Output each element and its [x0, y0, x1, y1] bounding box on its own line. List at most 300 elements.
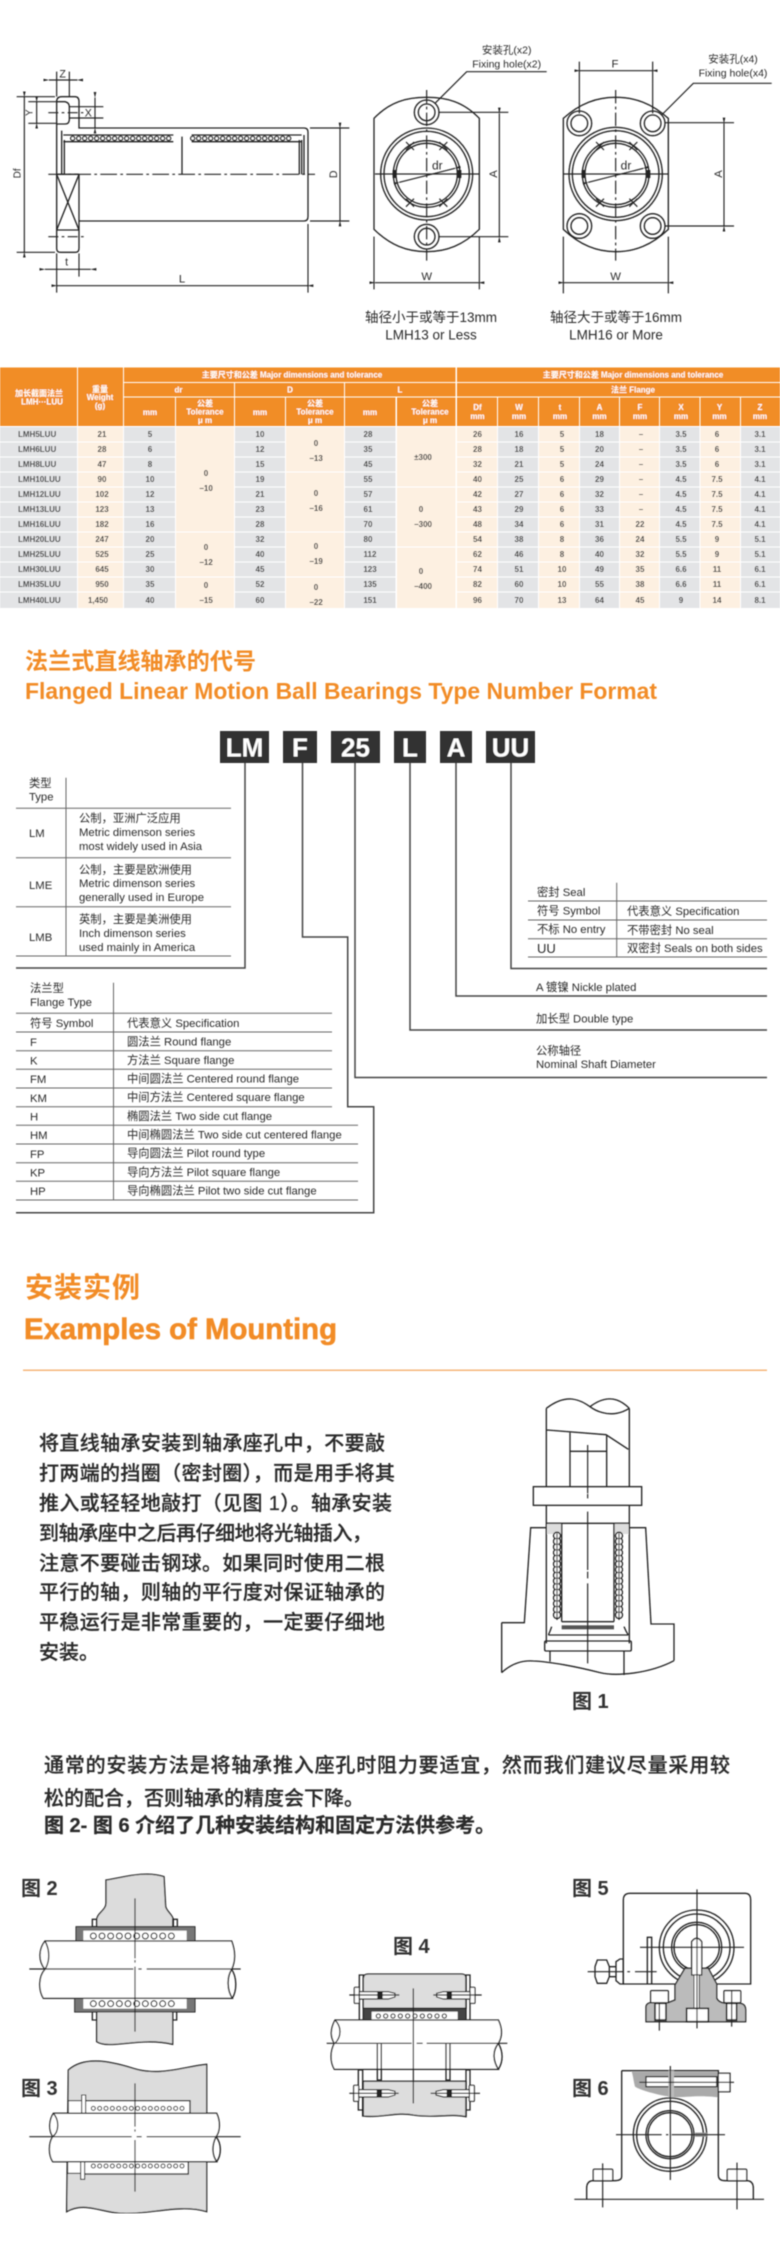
type table: 类型 [29, 776, 52, 790]
table rows: LMH13LUU [18, 505, 61, 514]
table rows: 26 [473, 430, 482, 439]
table rows: 3.1 [754, 445, 766, 454]
table rows: 16 [515, 430, 524, 439]
table rows: 29 [595, 475, 604, 484]
flange type table: FM [30, 1074, 46, 1086]
table rows: 6 [715, 460, 720, 469]
table body shading [0, 427, 780, 608]
table rows: 35 [146, 580, 155, 589]
table rows: – [639, 490, 644, 499]
table header: mm [553, 412, 567, 421]
table rows: 9 [679, 596, 684, 605]
table rows: 6.6 [675, 565, 687, 574]
seal table: UU [537, 941, 556, 956]
table header: μ m [198, 416, 212, 425]
table rows: 32 [256, 535, 265, 544]
table rows: 48 [473, 520, 482, 529]
table rows: 5.5 [675, 550, 687, 559]
merged tolerance values: 0 [419, 567, 424, 576]
table rows: 5 [148, 430, 153, 439]
table rows: 25 [515, 475, 524, 484]
table rows: 57 [364, 490, 373, 499]
flange type table: 导向方法兰 Pilot square flange [127, 1165, 280, 1179]
seal table: 不带密封 No seal [627, 923, 714, 937]
table header: 公差 [197, 398, 213, 408]
table rows: 7.5 [711, 475, 723, 484]
table rows: – [639, 445, 644, 454]
table rows: 3.5 [675, 445, 687, 454]
table header: mm [592, 412, 607, 421]
seal table: 密封 Seal [537, 885, 585, 899]
table rows: LMH10LUU [18, 475, 61, 484]
table rows: 45 [364, 460, 373, 469]
table rows: 5 [560, 445, 565, 454]
flange type table: 法兰型 [30, 981, 64, 995]
table rows: 6.6 [675, 580, 687, 589]
caption: LMH13 or less: 轴径小于或等于13mm [365, 309, 497, 325]
table rows: 7.5 [711, 505, 723, 514]
flange type table: HM [30, 1130, 48, 1142]
text: mounting instructions: 平稳运行是非常重要的，一定要仔细地 [39, 1611, 385, 1634]
label: nominal shaft diameter: Nominal Shaft Diameter [536, 1059, 656, 1071]
heading: examples of mounting: 安装实例 [25, 1272, 140, 1303]
table header: A [597, 403, 603, 412]
table rows: 28 [364, 430, 373, 439]
table rows: 135 [363, 580, 377, 589]
text: mounting instructions: 注意不要碰击钢球。如果同时使用二根 [39, 1552, 385, 1575]
merged tolerance values: ±300 [414, 453, 432, 462]
figure 5 [588, 1889, 751, 2031]
label: nominal shaft diameter [536, 1044, 656, 1071]
table rows: 20 [595, 445, 604, 454]
table rows: 5 [560, 460, 565, 469]
type table: generally used in Europe [79, 892, 204, 904]
drawing: LMH16 or more front view: F [612, 58, 619, 70]
merged tolerance values: 0 [314, 542, 319, 551]
table rows: 30 [146, 565, 155, 574]
merged tolerance values: −400 [414, 582, 433, 591]
type table: 公制，亚洲广泛应用 [79, 811, 181, 825]
drawing: side section of flanged bearing [13, 68, 349, 293]
table rows: LMH5LUU [18, 430, 56, 439]
drawing: side section of flanged bearing: X [85, 107, 92, 119]
table rows: 29 [515, 505, 524, 514]
text: general mounting note [44, 1753, 730, 1837]
table rows: 14 [713, 596, 722, 605]
table rows: 64 [595, 596, 604, 605]
table rows: 8 [560, 535, 565, 544]
drawing: LMH16 or more front view [563, 58, 772, 293]
table rows: 5.1 [754, 550, 766, 559]
table rows: 55 [595, 580, 604, 589]
label: figure 1: 图 1 [572, 1691, 609, 1713]
table rows: LMH8LUU [18, 460, 56, 469]
figure 1: bearing in housing [502, 1399, 674, 1675]
table rows: 28 [473, 445, 482, 454]
table rows: 20 [146, 535, 155, 544]
table rows: 49 [595, 565, 604, 574]
merged tolerance values: −12 [199, 558, 213, 567]
text: mounting instructions: 推入或轻轻地敲打（见图 1）。轴承安装 [39, 1492, 392, 1515]
table header: mm [674, 412, 688, 421]
merged tolerance values: 0 [204, 543, 209, 552]
type table: LMB [29, 932, 52, 944]
table rows: 21 [98, 430, 107, 439]
drawing: side section of flanged bearing: Df [13, 168, 24, 178]
table rows: 123 [95, 505, 109, 514]
table rows: 40 [256, 550, 265, 559]
table header: 公差 [422, 398, 438, 408]
table rows: 74 [473, 565, 482, 574]
flange type table: 中间方法兰 Centered square flange [127, 1090, 305, 1104]
table rows: 82 [473, 580, 482, 589]
label: nickle plated: A 镀镍 Nickle plated [536, 980, 636, 994]
divider [23, 1370, 767, 1371]
flange type table: H [30, 1112, 38, 1124]
heading: type number format: Flanged Linear Motion Ball Bearings Type Number Format [25, 678, 657, 704]
text: mounting instructions: 平行的轴，则轴的平行度对保证轴承的 [39, 1581, 385, 1604]
table rows: 6 [560, 505, 565, 514]
table header: LMH···LUU [21, 398, 63, 406]
table rows: 52 [256, 580, 265, 589]
text: mounting instructions: 打两端的挡圈（密封圈），而是用手将其 [39, 1462, 395, 1485]
table rows: 15 [256, 460, 265, 469]
table rows: LMH35LUU [18, 580, 61, 589]
table rows: 247 [95, 535, 109, 544]
table rows: 3.1 [754, 460, 766, 469]
table rows: 70 [515, 596, 524, 605]
table rows: 6 [560, 475, 565, 484]
table rows: 31 [595, 520, 604, 529]
table rows: 22 [636, 520, 645, 529]
caption: LMH13 or less [365, 309, 497, 342]
table rows: 13 [146, 505, 155, 514]
table header: (g) [95, 402, 105, 410]
table rows: 51 [515, 565, 524, 574]
merged tolerance values: 0 [314, 583, 319, 592]
table rows: 40 [473, 475, 482, 484]
table header: mm [512, 412, 526, 421]
table rows: 19 [256, 475, 265, 484]
table header: X [678, 403, 684, 412]
table rows: 90 [98, 475, 107, 484]
table header: Tolerance [411, 408, 449, 416]
flange type table: K [30, 1056, 38, 1068]
table rows: 43 [473, 505, 482, 514]
callout: fixing hole x4: 安装孔(x4) [708, 52, 758, 66]
flange type table: 方法兰 Square flange [127, 1053, 234, 1067]
table rows: 3.5 [675, 460, 687, 469]
table rows: 7.5 [711, 520, 723, 529]
table header: mm [753, 412, 767, 421]
table rows: 62 [473, 550, 482, 559]
type table [16, 776, 231, 956]
table rows: 33 [595, 505, 604, 514]
flange type table: Flange Type [30, 997, 92, 1009]
table header: 主要尺寸和公差 Major dimensions and tolerance [543, 370, 724, 380]
drawing: LMH13 or less front view [374, 72, 547, 289]
text: general mounting note: 图 2- 图 6 介绍了几种安装结构和固定方法供参考。 [44, 1813, 495, 1837]
table rows: 40 [595, 550, 604, 559]
table rows: 12 [256, 445, 265, 454]
figure 4 [327, 1974, 507, 2117]
flange type table [16, 981, 358, 1200]
table rows: 24 [595, 460, 604, 469]
table rows: 32 [595, 490, 604, 499]
type table: LME [29, 880, 53, 892]
table rows: 4.5 [675, 520, 687, 529]
table rows: 38 [515, 535, 524, 544]
drawing: side section of flanged bearing: L [179, 274, 185, 286]
table rows: 45 [256, 565, 265, 574]
table header: mm [470, 412, 485, 421]
table rows: 6 [560, 520, 565, 529]
table header [0, 368, 780, 426]
seal table: 符号 Symbol [537, 904, 600, 918]
table rows: 25 [146, 550, 155, 559]
table rows: 96 [473, 596, 482, 605]
type table: 公制，主要是欧洲使用 [79, 862, 192, 876]
table rows: 28 [256, 520, 265, 529]
table rows: LMH20LUU [18, 535, 61, 544]
table rows: 10 [146, 475, 155, 484]
table rows: LMH25LUU [18, 550, 61, 559]
table rows [18, 430, 766, 605]
flange type table: F [30, 1037, 37, 1049]
table rows: 3.1 [754, 430, 766, 439]
table rows: 6.1 [754, 580, 766, 589]
caption: LMH16 or more: 轴径大于或等于16mm [550, 309, 682, 325]
text: general mounting note: 通常的安装方法是将轴承推入座孔时阻力要适宜，然而我们建议尽量采用较 [44, 1753, 730, 1777]
merged tolerance values: −13 [309, 454, 323, 463]
table rows: 55 [364, 475, 373, 484]
type table: most widely used in Asia [79, 841, 203, 853]
flange type table: 导向圆法兰 Pilot round type [127, 1146, 265, 1160]
callout: fixing hole x4 [699, 52, 767, 80]
type table: used mainly in America [79, 942, 196, 954]
heading: examples of mounting [24, 1272, 337, 1346]
drawing: LMH13 or less front view: W [421, 271, 432, 283]
table rows: 112 [364, 550, 377, 559]
table rows: 54 [473, 535, 482, 544]
flange type table: 中间圆法兰 Centered round flange [127, 1072, 299, 1086]
table rows: 5 [560, 430, 565, 439]
table rows: 11 [713, 580, 722, 589]
table rows: 525 [95, 550, 109, 559]
table rows: 28 [98, 445, 107, 454]
table header: Z [758, 403, 763, 412]
code boxes: A [447, 732, 466, 762]
type table: Type [29, 792, 54, 804]
table header: dr [174, 386, 182, 394]
merged tolerance values: −300 [414, 520, 433, 529]
table rows: 10 [256, 430, 265, 439]
table header: μ m [308, 416, 322, 425]
table rows: 4.5 [675, 505, 687, 514]
table rows: 40 [146, 596, 155, 605]
flange type table: 圆法兰 Round flange [127, 1034, 231, 1048]
flange type table: FP [30, 1149, 44, 1161]
table header: 主要尺寸和公差 Major dimensions and tolerance [202, 370, 383, 380]
table header: t [559, 403, 562, 412]
callout: fixing hole x2 [472, 44, 541, 70]
table rows: 6 [715, 445, 720, 454]
table header: mm [253, 408, 267, 417]
table rows: 6 [715, 430, 720, 439]
table rows: 5.5 [675, 535, 687, 544]
table rows: 42 [473, 490, 482, 499]
merged tolerance values: 0 [314, 489, 319, 498]
merged tolerance values: −19 [309, 557, 323, 566]
figure 6 [574, 2066, 764, 2209]
table header: mm [712, 412, 727, 421]
merged tolerance values: −10 [199, 484, 213, 493]
merged tolerance values: −22 [309, 598, 323, 607]
table rows: 18 [515, 445, 524, 454]
table rows: 21 [256, 490, 265, 499]
label: double type: 加长型 Double type [536, 1012, 633, 1026]
table rows: 102 [95, 490, 109, 499]
table rows: – [639, 475, 644, 484]
table rows: LMH16LUU [18, 520, 61, 529]
table rows: 9 [715, 535, 720, 544]
table rows: 35 [364, 445, 373, 454]
table rows: 645 [95, 565, 109, 574]
table rows: – [639, 430, 644, 439]
seal table: 代表意义 Specification [627, 904, 739, 918]
table header: μ m [423, 416, 437, 425]
table header: mm [143, 408, 157, 417]
drawing: LMH13 or less front view: dr [432, 158, 443, 172]
label: figure 6: 图 6 [572, 2078, 609, 2100]
merged tolerance values: 0 [204, 581, 209, 590]
table rows: 61 [364, 505, 373, 514]
table rows: 123 [363, 565, 377, 574]
drawing: LMH13 or less front view: A [488, 170, 500, 178]
table rows: 8 [148, 460, 153, 469]
table rows: 9 [715, 550, 720, 559]
text: mounting instructions [39, 1432, 395, 1664]
table rows: 6 [560, 490, 565, 499]
heading: type number format: 法兰式直线轴承的代号 [25, 648, 256, 674]
table rows: 23 [256, 505, 265, 514]
table rows: 6 [148, 445, 153, 454]
table rows: 21 [515, 460, 524, 469]
flange type table: 中间椭圆法兰 Two side cut centered flange [127, 1128, 342, 1142]
table header: F [638, 403, 643, 412]
table rows: LMH40LUU [18, 596, 61, 605]
table rows: – [639, 460, 644, 469]
table rows: 13 [558, 596, 567, 605]
drawing: side section of flanged bearing: Z [59, 68, 66, 80]
table rows: 6.1 [754, 565, 766, 574]
drawing: LMH16 or more front view: W [610, 271, 621, 283]
label: figure 5: 图 5 [572, 1878, 609, 1900]
code boxes: L [402, 732, 418, 762]
table rows: 151 [363, 596, 377, 605]
table rows: LMH12LUU [18, 490, 61, 499]
flange type table: 导向椭圆法兰 Pilot two side cut flange [127, 1184, 317, 1198]
merged tolerance values: 0 [314, 439, 319, 448]
table rows: 47 [98, 460, 107, 469]
caption: LMH16 or more: LMH16 or More [569, 328, 663, 342]
type table: 英制，主要是美洲使用 [79, 912, 192, 926]
code boxes: LM [226, 732, 263, 762]
table rows: 4.1 [754, 490, 766, 499]
table rows: 4.1 [754, 520, 766, 529]
table header: W [515, 403, 523, 412]
connector lines [16, 763, 767, 1213]
table rows: 45 [636, 596, 645, 605]
seal table: 双密封 Seals on both sides [627, 941, 763, 955]
table rows: 182 [95, 520, 109, 529]
table rows: 46 [515, 550, 524, 559]
table rows: 80 [364, 535, 373, 544]
flange type table: 代表意义 Specification [127, 1016, 239, 1030]
code boxes: F [292, 732, 308, 762]
table header: 加长截面法兰 [15, 388, 63, 398]
flange type table: KP [30, 1168, 45, 1180]
code boxes: 25 [341, 732, 370, 762]
table rows: 10 [558, 580, 567, 589]
table rows: 3.5 [675, 430, 687, 439]
table header: Tolerance [186, 408, 224, 416]
table rows: 4.5 [675, 475, 687, 484]
dimensions table [0, 368, 780, 608]
table header: Y [717, 403, 723, 412]
seal table [528, 883, 767, 957]
table rows: 4.1 [754, 475, 766, 484]
drawing: side section of flanged bearing: Y [25, 109, 36, 116]
table rows: 4.1 [754, 505, 766, 514]
merged tolerance values: −16 [309, 504, 323, 513]
caption: LMH13 or less: LMH13 or Less [385, 328, 477, 342]
table rows: 36 [595, 535, 604, 544]
heading: type number format [25, 648, 657, 704]
table header: 重量 [92, 384, 108, 394]
table rows: 7.5 [711, 490, 723, 499]
flange type table: 椭圆法兰 Two side cut flange [127, 1109, 272, 1123]
type table: Metric dimenson series [79, 878, 195, 890]
table rows: 950 [95, 580, 109, 589]
type table: Metric dimenson series [79, 827, 195, 839]
table header: D [287, 386, 293, 394]
table rows: 24 [636, 535, 645, 544]
table rows: 1,450 [88, 596, 109, 605]
table rows: 8.1 [754, 596, 766, 605]
flange type table: KM [30, 1093, 47, 1105]
table rows: 8 [560, 550, 565, 559]
seal table: 不标 No entry [537, 923, 606, 936]
label: figure 4: 图 4 [393, 1936, 431, 1958]
flange type table: HP [30, 1186, 46, 1198]
table rows: 60 [256, 596, 265, 605]
drawing: side section of flanged bearing: D [328, 170, 340, 178]
table rows: 32 [473, 460, 482, 469]
text: mounting instructions: 将直线轴承安装到轴承座孔中，不要敲 [39, 1432, 385, 1455]
table rows: 32 [636, 550, 645, 559]
table header: Df [473, 403, 482, 412]
code boxes [220, 731, 535, 763]
drawing: side section of flanged bearing: t [65, 257, 68, 269]
table rows: 60 [515, 580, 524, 589]
table rows: 5.1 [754, 535, 766, 544]
callout: fixing hole x4: Fixing hole(x4) [699, 68, 767, 80]
type table: Inch dimenson series [79, 928, 186, 940]
table rows: 12 [146, 490, 155, 499]
table rows: 38 [636, 580, 645, 589]
table header: mm [363, 408, 377, 417]
